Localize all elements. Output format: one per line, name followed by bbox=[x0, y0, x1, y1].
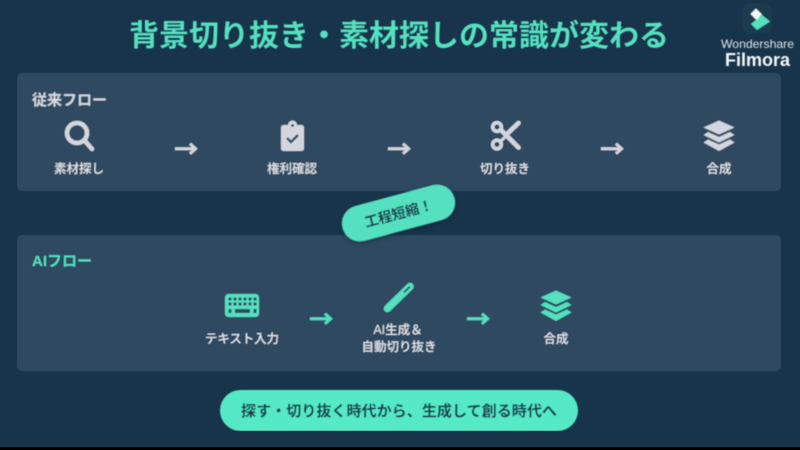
arrow 4 bbox=[310, 314, 330, 324]
arrow 1 bbox=[175, 144, 196, 154]
icon: clipboard check bbox=[281, 120, 304, 151]
panel: AI flow bbox=[17, 235, 781, 371]
label: material search: 素材探し bbox=[54, 161, 104, 176]
label: AI generation and auto cutout: 自動切り抜き bbox=[361, 339, 437, 354]
arrow 5 bbox=[467, 314, 488, 324]
badge: shortened process: 工程短縮！ bbox=[363, 197, 435, 230]
label: rights check: 権利確認 bbox=[267, 161, 317, 176]
callout: conclusion bbox=[220, 390, 578, 431]
label: composite: 合成 bbox=[706, 161, 732, 176]
arrow 3 bbox=[601, 144, 622, 154]
icon: magnifier bbox=[67, 123, 92, 149]
label: AI generation and auto cutout bbox=[361, 322, 437, 354]
label: cut out: 切り抜き bbox=[480, 161, 530, 176]
logo: Wondershare Filmora: Wondershare bbox=[721, 37, 794, 51]
label: text input: テキスト入力 bbox=[205, 332, 279, 346]
panel: traditional flow bbox=[17, 73, 781, 191]
icon: scissors bbox=[493, 123, 518, 149]
logo: Wondershare Filmora: Filmora bbox=[725, 49, 791, 70]
badge: shortened process bbox=[338, 181, 459, 245]
arrow 2 bbox=[388, 144, 408, 154]
heading: AI flow: AIフロー bbox=[32, 253, 92, 270]
heading: traditional flow: 従来フロー bbox=[32, 92, 107, 109]
icon: layers bbox=[540, 290, 572, 321]
title: 背景切り抜き・素材探しの常識が変わる bbox=[129, 19, 669, 53]
logo: Wondershare Filmora bbox=[721, 3, 794, 70]
callout: conclusion: 探す・切り抜く時代から、生成して創る時代へ bbox=[241, 402, 557, 420]
icon: keyboard bbox=[225, 294, 259, 317]
icon: layers bbox=[704, 120, 734, 151]
icon: AI wand bbox=[388, 286, 410, 308]
label: composite: 合成 bbox=[543, 331, 569, 346]
label: AI generation and auto cutout: AI生成＆ bbox=[373, 322, 423, 337]
